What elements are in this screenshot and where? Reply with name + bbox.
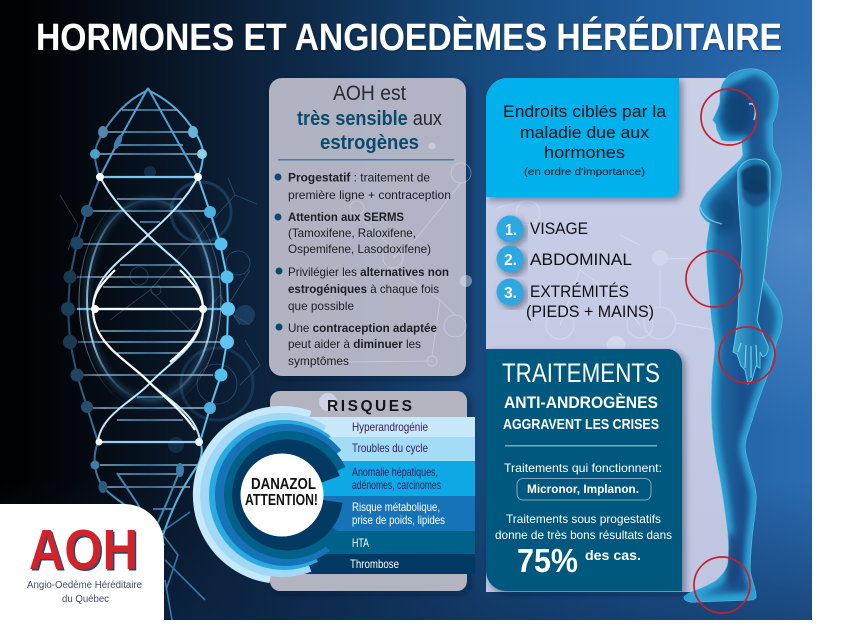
lower helix tail [110,505,205,620]
concentric danazol target: ATTENTION! [245,492,318,509]
75% statistic: donne de très bons résultats dans [495,528,672,542]
effective treatments: Micronor, Implanon. [527,482,639,496]
heading [278,82,454,160]
bullet: alternatives: que possible [288,299,354,313]
inner top strands [100,88,198,177]
bullet: progestatif: première ligne + contraception [288,188,451,202]
bright helix [93,177,203,442]
faint rungs [77,110,222,509]
panel: light body backdrop [486,78,745,592]
risk bars: Risque métabolique, [352,500,440,514]
effective treatments: Traitements qui fonctionnent: [504,461,662,475]
bullet: alternatives: estrogéniques à chaque fois [288,282,439,296]
heading: AOH est [333,82,406,105]
risk bars: Anomalie hépatiques, [352,465,438,479]
bullet: SERMS: Attention aux SERMS [288,210,404,224]
risk bars [300,417,475,574]
panel: endroits ciblés: hormones [544,144,625,162]
panel: endroits ciblés: (en ordre d'importance) [524,167,645,178]
bright rungs [77,177,223,442]
item: extrémités: (PIEDS + MAINS) [526,302,654,321]
logo: AOH: du Québec [62,594,109,605]
item: abdominal [496,246,632,272]
ear [749,104,755,120]
item: visage: 1. [505,222,517,239]
effective treatments [504,461,662,500]
helix nodes [61,126,235,493]
glow arcs [87,200,213,400]
panel: traitements [486,349,682,591]
risk bars: HTA [352,536,369,550]
panel: AOH est très sensible aux estrogènes [269,78,472,376]
item: visage: VISAGE [530,219,588,238]
panel: endroits ciblés: maladie due aux [520,124,650,142]
item: extrémités: EXTRÉMITÉS [530,282,629,301]
bullet: progestatif: Progestatif : traitement de [288,170,430,184]
network background pattern [60,166,260,453]
item: abdominal: ABDOMINAL [530,250,632,269]
heading: très sensible aux [297,108,442,130]
logo: AOH [0,504,164,621]
item: visage [496,216,588,242]
body silhouette [684,69,782,602]
bullet: progestatif [274,170,451,202]
highlight circles on body [686,89,775,613]
item: extrémités: 3. [504,285,517,302]
list: targeted body sites [496,216,654,321]
bullet: SERMS [274,210,431,256]
risk bars: Thrombose [350,557,399,571]
bullet: SERMS: Ospemifene, Lasodoxifene) [288,242,431,256]
item: abdominal: 2. [504,252,517,269]
logo: AOH: Angio-Oedème Héréditaire [27,580,142,591]
heading: traitements [502,358,660,446]
75% statistic: 75% [517,542,578,579]
bullet: SERMS: (Tamoxifene, Raloxifene, [288,226,416,240]
bullet: contraception [276,321,437,368]
75% statistic: des cas. [585,547,641,563]
bullet: alternatives [276,265,449,313]
panel: risques [193,391,475,591]
heading: traitements: ANTI-ANDROGÈNES [504,393,658,412]
risk bars: Troubles du cycle [352,441,428,455]
risk bars: prise de poids, lipides [352,513,445,527]
DNA double helix [61,88,235,620]
risk bars: Hyperandrogénie [352,420,428,434]
bullet: contraception: Une contraception adaptée [288,321,437,335]
concentric danazol target [193,406,346,583]
heading: traitements: TRAITEMENTS [502,358,660,388]
bullet: contraception: symptômes [288,354,349,368]
concentric danazol target: DANAZOL [251,476,316,493]
heading: traitements: AGGRAVENT LES CRISES [503,417,659,433]
bullet: contraception: peut aider à diminuer les [288,337,421,351]
arm [733,159,770,384]
heading: risques: RISQUES [327,398,412,415]
risk bars: adénomes, carcinomes [352,478,441,492]
heading: estrogènes [320,132,419,154]
outer strands [68,90,163,535]
panel: endroits ciblés: Endroits ciblés par la [503,103,667,121]
75% statistic: Traitements sous progestatifs [506,512,661,526]
panel network decoration [330,142,472,366]
logo: AOH: AOH [30,520,140,584]
bullet: alternatives: Privilégier les alternatives non [288,265,449,279]
75% statistic [495,512,672,579]
item: extrémités [496,278,654,321]
panel: endroits ciblés [486,78,679,197]
logo: AOH: AOH [29,518,138,582]
